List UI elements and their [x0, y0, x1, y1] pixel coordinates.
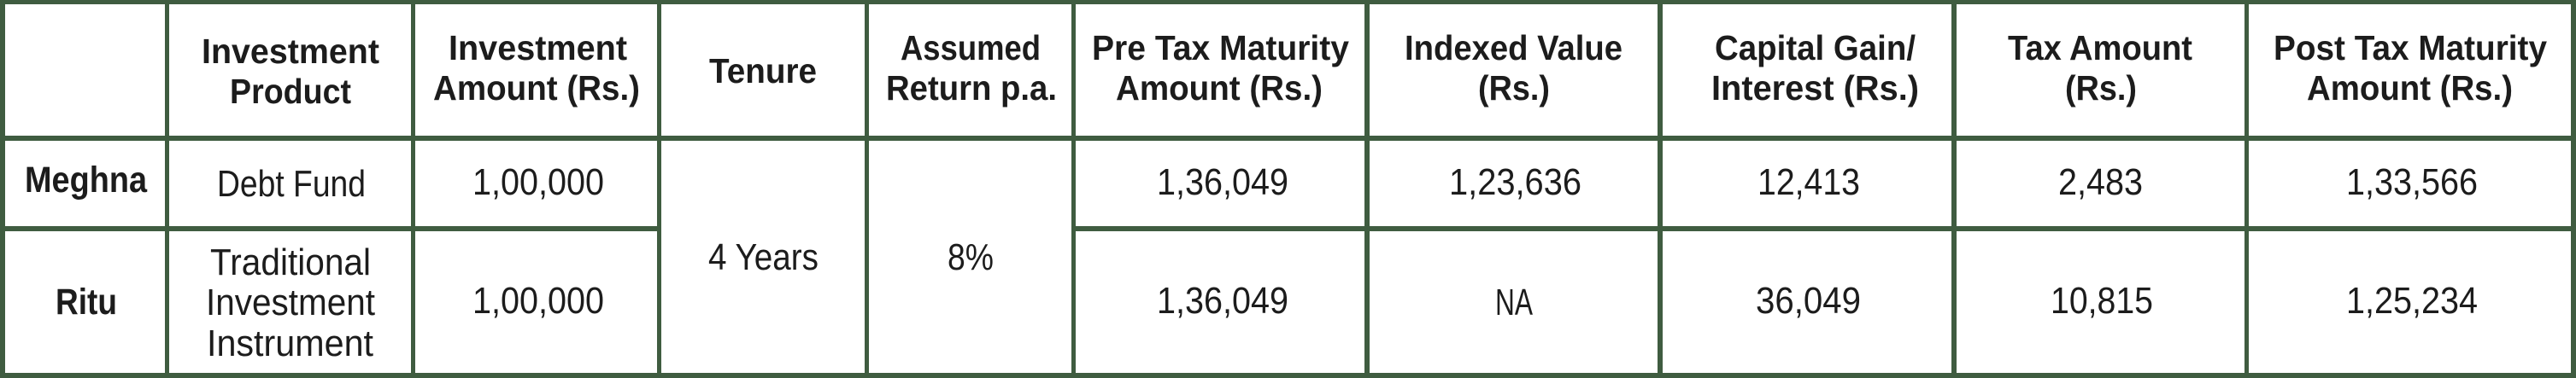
heading: Post Tax Maturity Amount: [2274, 28, 2547, 108]
heading: Tax Amount: Tax Amount: [2008, 28, 2192, 67]
capital gain: 12,413: [1757, 161, 1860, 203]
heading: Assumed Return p.a.: Return p.a.: [886, 68, 1057, 108]
merged cell: Assumed return value: 8%: [948, 236, 994, 278]
investment amount: 1,00,000: [472, 280, 604, 322]
interest: 36,049: [1756, 280, 1861, 322]
row: Meghna: [25, 160, 2478, 205]
heading: Investment Amount: Amount (Rs.): [433, 68, 640, 108]
row label: Ritu: Ritu: [56, 282, 117, 323]
indexed value: NA: [1495, 282, 1533, 323]
product: Traditional Investment Instrument: Investment: [206, 282, 375, 323]
heading: Investment Product: [202, 32, 379, 111]
post tax maturity amount: 1,33,566: [2346, 161, 2478, 203]
heading: Tax Amount: (Rs.): [2065, 68, 2137, 108]
heading: Investment Product: Investment: [202, 32, 379, 71]
tax amount: 10,815: [2051, 280, 2153, 322]
investment amount: 1,00,000: [472, 161, 604, 203]
heading: Capital Gain / Interest: [1711, 28, 1919, 108]
row label: Meghna: Meghna: [25, 160, 148, 201]
heading: Post Tax Maturity Amount: Amount (Rs.): [2307, 68, 2513, 108]
heading: Assumed Return p.a.: Assumed: [901, 28, 1041, 67]
heading: Investment Amount: Investment: [449, 28, 627, 67]
heading: Investment Amount: [433, 28, 640, 108]
heading: Tax Amount: [2008, 28, 2192, 108]
heading: Capital Gain / Interest: Interest (Rs.): [1711, 68, 1919, 108]
heading: Indexed Value: Indexed Value: [1405, 28, 1622, 67]
pre tax maturity amount: 1,36,049: [1157, 280, 1288, 322]
heading: Capital Gain / Interest: Capital Gain/: [1715, 28, 1916, 67]
row: Ritu: [56, 241, 2478, 364]
heading: Pre Tax Maturity Amount: Pre Tax Maturity: [1092, 28, 1349, 67]
heading: Assumed Return p.a.: [886, 28, 1057, 108]
product: Traditional Investment Instrument: Instrument: [207, 323, 373, 364]
heading: Pre Tax Maturity Amount: Amount (Rs.): [1116, 68, 1323, 108]
heading: Investment Product: Product: [230, 72, 351, 111]
product: Debt Fund: Debt Fund: [217, 163, 366, 205]
heading: Post Tax Maturity Amount: Post Tax Maturity: [2274, 28, 2547, 67]
tax amount: 2,483: [2058, 161, 2143, 203]
heading: Tenure: Tenure: [709, 51, 817, 90]
product: Traditional Investment Instrument: Traditional: [210, 241, 371, 283]
heading: Indexed Value: (Rs.): [1478, 68, 1550, 108]
merged cell: Tenure value: 4 Years: [708, 236, 819, 278]
indexed value: 1,23,636: [1449, 161, 1581, 203]
product: Traditional Investment Instrument: [206, 241, 375, 364]
heading: Indexed Value: [1405, 28, 1622, 108]
post tax maturity amount: 1,25,234: [2346, 280, 2478, 322]
heading: Pre Tax Maturity Amount: [1092, 28, 1349, 108]
pre tax maturity amount: 1,36,049: [1157, 161, 1288, 203]
header row: [202, 28, 2547, 111]
